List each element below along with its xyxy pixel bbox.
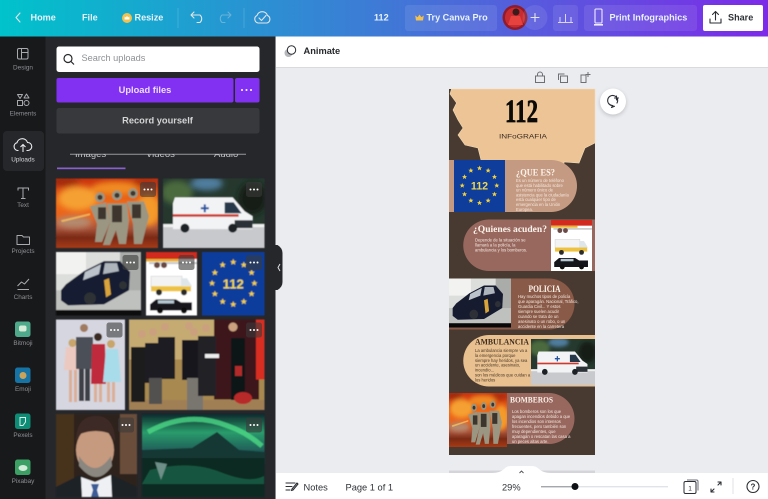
- thumbnail overflow buttons: [106, 182, 262, 432]
- tabs: Images Videos Audio: [57, 154, 246, 170]
- rail item: Text: [17, 188, 29, 209]
- icon: animate: [284, 46, 296, 57]
- button: Upload files: [56, 78, 234, 102]
- body text: siempre hay heridos, ya sea: [475, 358, 528, 363]
- thumbnail: king portrait: [56, 414, 137, 497]
- rail item: Uploads active: Uploads: [11, 156, 35, 164]
- rail item: Design: [13, 48, 33, 72]
- body text: [518, 294, 579, 329]
- pill background: [463, 220, 595, 271]
- thumbnail: aurora landscape: [142, 414, 265, 497]
- body text: Depende de la situación se: [475, 238, 526, 242]
- image: firefighters: [444, 391, 508, 447]
- rail item: Charts: [14, 279, 32, 301]
- rail item: Uploads active: [3, 131, 44, 171]
- rail item: Emoji: [15, 368, 31, 393]
- button: insights chart: [553, 5, 578, 31]
- body text: cuando se trata de un: [518, 314, 559, 319]
- heading: BOMBEROS: [510, 394, 553, 404]
- rail item: Elements: Elements: [10, 110, 36, 118]
- header title 112: 112: [505, 94, 538, 130]
- rail item: Bitmoji: [13, 322, 33, 347]
- animate toolbar: [276, 36, 768, 68]
- zoom slider: [541, 483, 668, 490]
- uploads panel: [46, 36, 276, 499]
- page action icons: [536, 72, 590, 82]
- button: Upload files: Upload files: [119, 85, 171, 95]
- image: police car: [449, 278, 511, 328]
- tabs: Images Videos Audio: Images: [75, 149, 106, 160]
- rail item: Emoji: Emoji: [15, 386, 31, 393]
- body text: ambulancia y los bomberos.: [475, 248, 527, 252]
- label: page count: Page 1 of 1: [346, 482, 393, 492]
- icon: fullscreen: [711, 482, 721, 492]
- icon: resize crown badge: [122, 13, 132, 23]
- rail item: Charts: Charts: [14, 294, 32, 301]
- body text: emergencia en la Unión: [516, 202, 561, 207]
- body text: los incendios son intensos: [512, 419, 561, 424]
- pill background: [449, 393, 575, 444]
- rail item: Elements: [10, 94, 36, 118]
- body text: asesinato o un robo, o un: [518, 319, 566, 324]
- button: add collaborator: [522, 5, 548, 30]
- thumbnail: emergency vehicles: [146, 252, 197, 316]
- body text: un peces altas arte.: [512, 439, 549, 444]
- body text: son los médicos que cuidan a: [475, 372, 531, 378]
- body text: aparagán o rescatan las casa a: [512, 434, 571, 439]
- body text: la emergencia porque: [475, 353, 516, 358]
- icon: cloud saved: [255, 12, 270, 23]
- body text: siempre suelen acudir: [518, 309, 560, 314]
- body text: que está habilitado sobre: [516, 183, 563, 188]
- thumbnail: firefighters: [48, 177, 160, 248]
- thumbnail: royal family: [56, 320, 125, 410]
- icon: lock: [536, 72, 544, 82]
- thumbnail: 112 flag: [202, 252, 264, 316]
- body text: Hay muchos tipos de policía: [518, 294, 571, 299]
- image: 112 flag: [454, 160, 505, 212]
- image: ambulance: [530, 338, 596, 385]
- button: Try Canva Pro: Try Canva Pro: [426, 12, 488, 22]
- section: Bomberos: [444, 391, 575, 447]
- body text: los heridos: [475, 377, 495, 382]
- body text: está cualquier tipo de: [516, 197, 556, 202]
- body text: que aparagán. Nacional, Tráfico,: [518, 299, 579, 304]
- icon: help: ?: [751, 482, 756, 492]
- heading: POLICIA: [528, 284, 561, 294]
- heading: ¿QUE ES?: [516, 168, 555, 178]
- rail item: Projects: [11, 236, 35, 255]
- body text: frecuentes, pero también son: [512, 424, 567, 429]
- icon: undo: [191, 12, 202, 22]
- body text: Es un número de teléfono: [516, 178, 565, 183]
- body text: incendio...: [475, 368, 494, 373]
- button: more upload options: [235, 78, 260, 102]
- left icon rail: [0, 36, 46, 499]
- section: Policia: [449, 278, 579, 330]
- search box: Search uploads: [82, 53, 146, 63]
- icon: duplicate page: [558, 74, 568, 82]
- body text: [512, 409, 571, 444]
- section: Que es: [449, 160, 577, 212]
- divider: [732, 478, 734, 494]
- icon: notes: [286, 483, 298, 490]
- body text: accidente en la carretera: [518, 324, 565, 329]
- menu: File: File: [82, 12, 98, 22]
- body text: asistencia que la ciudadanía: [516, 192, 570, 197]
- heading: ¿Quienes acuden?: [473, 225, 547, 235]
- section: Quienes acuden: [463, 220, 595, 271]
- rail item: Pixabay: [12, 460, 35, 485]
- menu: Home: Home: [30, 12, 56, 22]
- pill background: [463, 335, 595, 386]
- icon: back chevron: [16, 13, 20, 22]
- page panel handle: [492, 466, 551, 473]
- button: Record yourself: [56, 108, 260, 134]
- pill background: [449, 160, 577, 212]
- menu: Resize: Resize: [134, 12, 163, 22]
- rail item: Design: Design: [13, 64, 33, 72]
- bottom status bar: [276, 466, 768, 499]
- icon: add page: [581, 72, 590, 82]
- body text: un número único de: [516, 188, 554, 193]
- label: Animate: Animate: [304, 46, 340, 56]
- rail item: Pixabay: Pixabay: [12, 478, 35, 485]
- body text: Los bomberos son los que: [512, 409, 562, 414]
- icon: redo: [220, 12, 231, 22]
- image: emergency vehicles: [551, 220, 592, 271]
- torn paper header shape: [450, 89, 595, 164]
- icon: help: [747, 480, 759, 492]
- section: Ambulancia: [463, 335, 596, 386]
- thumbnail: ambulance: [161, 177, 266, 248]
- label: Notes: Notes: [304, 482, 328, 492]
- rail item: Bitmoji: Bitmoji: [13, 340, 33, 347]
- icon: page grid: 1: [688, 486, 692, 492]
- rail item: Text: Text: [17, 202, 29, 209]
- search box: [56, 46, 260, 72]
- body text: un accidente, asesinato,: [475, 363, 520, 368]
- next page preview strip: [449, 470, 595, 474]
- photo thumbnails: [48, 177, 266, 497]
- button: Share: [703, 5, 763, 31]
- button: Record yourself: Record yourself: [122, 116, 194, 126]
- thumbnail: police car: [56, 252, 141, 316]
- dividers: [178, 8, 244, 28]
- body text: muy dependientes, que: [512, 429, 556, 434]
- heading: AMBULANCIA: [475, 336, 530, 346]
- comment button: [600, 88, 626, 116]
- rail item: Pexels: Pexels: [13, 432, 33, 439]
- body text: [475, 348, 531, 382]
- body text: Guardia Civil... Y estos: [518, 304, 560, 309]
- body text: [475, 238, 527, 252]
- button: Print Infographics: [584, 5, 697, 31]
- body text: [516, 178, 570, 212]
- thumbnail: ceremony: [129, 320, 264, 410]
- avatar: [502, 5, 528, 30]
- infographic page: [444, 89, 596, 455]
- tabs: Images Videos Audio: Videos: [146, 149, 175, 160]
- body text: Europea.: [516, 207, 533, 212]
- rail item: Projects: Projects: [11, 248, 35, 255]
- tabs: Images Videos Audio: Audio: [214, 149, 238, 160]
- button: Try Canva Pro: [405, 5, 497, 31]
- body text: apagan incendios debido a que: [512, 414, 571, 419]
- document title: 112: [374, 12, 389, 22]
- button: Share: Share: [728, 12, 753, 22]
- top navigation bar: [0, 0, 768, 36]
- body text: llamará a la policía, la: [475, 242, 516, 248]
- rail item: Pexels: [13, 414, 33, 439]
- pill background: [449, 278, 575, 330]
- button: Print Infographics: Print Infographics: [610, 12, 687, 22]
- body text: La ambulancia siempre va a: [475, 348, 528, 353]
- panel collapse handle: [276, 245, 282, 290]
- icon: page grid: [684, 480, 698, 494]
- label: zoom percent: 29%: [502, 482, 521, 492]
- canvas background: [276, 36, 768, 499]
- header subtitle: INFoGRAFIA: [499, 134, 548, 140]
